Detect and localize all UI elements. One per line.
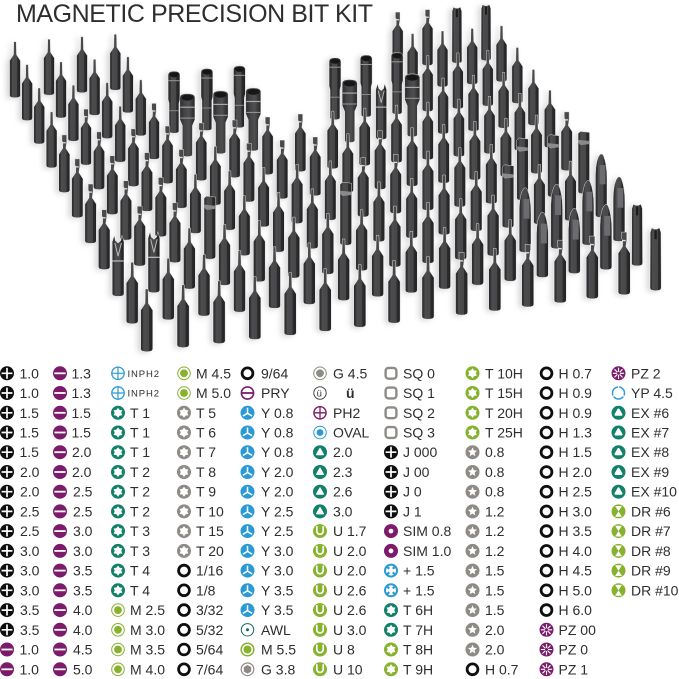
legend column 4: M 5.0 <box>196 385 231 401</box>
legend column 3: INPH2 <box>128 389 160 400</box>
legend column 9: PZ 00 <box>558 622 596 638</box>
legend column 4: 5/32 <box>196 622 223 638</box>
legend column 6: U 2.6 <box>333 602 367 618</box>
legend column 2: 3.5 <box>73 582 93 598</box>
legend column 6: U 10 <box>333 661 363 677</box>
legend column 10: EX #10 <box>631 484 677 500</box>
legend column 5: Y 0.8 <box>261 444 294 460</box>
legend column 6: U 1.7 <box>333 523 367 539</box>
legend column 5: Y 2.0 <box>261 464 294 480</box>
legend column 9: H 0.9 <box>558 405 592 421</box>
legend column 8 <box>466 365 523 677</box>
legend column 3: T 2 <box>130 484 150 500</box>
legend column 7: + 1.5 <box>403 563 435 579</box>
legend column 9: H 3.0 <box>558 503 592 519</box>
legend column 5: Y 3.0 <box>261 563 294 579</box>
legend column 6: U 8 <box>333 642 355 658</box>
legend column 7: SIM 1.0 <box>403 543 451 559</box>
legend column 10: PZ 2 <box>631 365 661 381</box>
legend column 3: T 2 <box>130 503 150 519</box>
legend column 2: 4.0 <box>73 602 93 618</box>
bit row 10 <box>126 204 643 324</box>
legend column 7: T 7H <box>403 622 433 638</box>
legend column 6: G 4.5 <box>333 365 367 381</box>
legend column 4: T 20 <box>196 543 224 559</box>
legend column 3: T 4 <box>130 563 150 579</box>
bit row 5 <box>59 90 555 193</box>
legend column 8: 0.8 <box>485 444 505 460</box>
legend column 10: EX #9 <box>631 464 669 480</box>
legend column 2: 2.0 <box>72 464 92 480</box>
legend column 9: H 0.7 <box>558 365 592 381</box>
legend column 4: T 10 <box>196 503 224 519</box>
legend column 8: 2.0 <box>485 622 505 638</box>
legend column 1: 1.0 <box>20 365 39 381</box>
legend column 8: T 25H <box>485 424 523 440</box>
legend column 10: EX #6 <box>631 405 669 421</box>
legend column 9: H 2.5 <box>558 484 592 500</box>
legend column 9: H 6.0 <box>558 602 592 618</box>
legend column 8: 1.5 <box>485 563 505 579</box>
legend column 6 <box>313 365 370 677</box>
legend column 3: M 2.5 <box>130 602 165 618</box>
legend column 2: 4.5 <box>73 642 93 658</box>
legend column 6: U 2.6 <box>333 582 367 598</box>
legend column 3: T 3 <box>130 543 150 559</box>
legend column 1: 3.0 <box>20 543 40 559</box>
legend column 7: SQ 1 <box>403 385 435 401</box>
legend column 5: Y 3.5 <box>261 582 294 598</box>
legend column 2: 3.0 <box>73 523 93 539</box>
bit row 11 <box>141 228 661 352</box>
bit row 3 with small sockets <box>34 48 523 144</box>
legend column 4: T 7 <box>196 444 216 460</box>
legend column 2 <box>53 365 93 677</box>
legend column 8: T 10H <box>485 365 523 381</box>
legend column 2: 3.5 <box>73 563 93 579</box>
legend column 5: G 3.8 <box>261 661 295 677</box>
legend column 3: M 3.5 <box>130 642 165 658</box>
bit row 2 <box>22 26 507 121</box>
title: MAGNETIC PRECISION BIT KIT <box>16 0 373 28</box>
legend column 1: 1.5 <box>20 424 39 440</box>
legend column 9: H 2.0 <box>558 464 592 480</box>
legend column 8: 0.8 <box>485 484 505 500</box>
legend column 9: PZ 1 <box>558 661 588 677</box>
legend column 5 <box>240 365 296 677</box>
legend column 4: 7/64 <box>196 661 223 677</box>
legend column 4: 1/8 <box>196 582 216 598</box>
legend column 1: 1.5 <box>20 444 39 460</box>
legend column 8: 0.8 <box>485 464 505 480</box>
legend column 7: SQ 0 <box>403 365 435 381</box>
legend column 2: 3.0 <box>73 543 93 559</box>
legend column 5: M 5.5 <box>261 642 296 658</box>
legend column 3: T 2 <box>130 464 150 480</box>
legend column 7: T 9H <box>403 661 433 677</box>
legend column 7: J 1 <box>403 503 422 519</box>
legend column 6: OVAL <box>333 424 370 440</box>
legend column 8: 1.5 <box>485 602 505 618</box>
legend column 9: H 1.5 <box>558 444 592 460</box>
legend column 4: 3/32 <box>196 602 223 618</box>
legend column 7: J 00 <box>403 464 430 480</box>
legend column 2: 2.0 <box>72 444 92 460</box>
legend column 8: 1.2 <box>485 523 505 539</box>
legend column 7: SIM 0.8 <box>403 523 451 539</box>
legend column 10: DR #8 <box>631 543 671 559</box>
bit row 4 with large sockets <box>46 70 539 168</box>
legend column 8: H 0.7 <box>485 661 519 677</box>
legend column 6: ü <box>346 385 355 401</box>
legend column 1: 1.5 <box>20 405 39 421</box>
legend column 2: 5.0 <box>73 661 93 677</box>
legend column 9 <box>540 365 596 677</box>
legend column 10: DR #6 <box>631 503 671 519</box>
legend column 2: 1.5 <box>72 405 91 421</box>
legend column 7: J 000 <box>403 444 437 460</box>
legend column 6: 3.0 <box>333 503 353 519</box>
bit row 7 <box>85 131 590 243</box>
legend column 3: T 3 <box>130 523 150 539</box>
legend column 8: 2.0 <box>485 642 505 658</box>
legend column 5: Y 2.5 <box>261 503 294 519</box>
legend column 6: 2.6 <box>333 484 353 500</box>
legend column 5: Y 3.5 <box>261 602 294 618</box>
legend column 2: 2.5 <box>73 503 93 519</box>
legend column 1: 2.5 <box>20 523 40 539</box>
legend column 2: 4.0 <box>73 622 93 638</box>
legend column 4 <box>177 365 231 677</box>
legend column 4: T 6 <box>196 424 216 440</box>
legend column 7: + 1.5 <box>403 582 435 598</box>
legend column 4: M 4.5 <box>196 365 231 381</box>
legend column 1: 3.0 <box>20 563 40 579</box>
legend column 3: T 1 <box>130 444 150 460</box>
legend column 7: T 6H <box>403 602 433 618</box>
legend column 5: AWL <box>261 622 291 638</box>
legend column 7: SQ 2 <box>403 405 435 421</box>
legend column 7: T 8H <box>403 642 433 658</box>
legend column 10: EX #8 <box>631 444 669 460</box>
legend column 1: 1.0 <box>20 385 39 401</box>
legend column 3 <box>111 367 165 677</box>
legend column 5: PRY <box>261 385 290 401</box>
bit row 6 <box>72 112 572 218</box>
legend column 5: Y 2.0 <box>261 484 294 500</box>
legend column 4: T 5 <box>196 405 216 421</box>
legend column 9: H 0.9 <box>558 385 592 401</box>
legend column 8: T 20H <box>485 405 523 421</box>
legend column 6: ü <box>317 388 322 400</box>
legend column 9: H 5.0 <box>558 582 592 598</box>
legend column 10 <box>612 365 679 598</box>
legend column 5: 9/64 <box>261 365 288 381</box>
legend column 1: 3.5 <box>20 622 40 638</box>
legend column 6: 2.3 <box>333 464 353 480</box>
legend column 5: Y 0.8 <box>261 424 294 440</box>
legend column 8: 1.5 <box>485 582 505 598</box>
legend column 4: T 15 <box>196 523 224 539</box>
legend column 4: 1/16 <box>196 563 223 579</box>
legend column 6: PH2 <box>333 405 360 421</box>
bit row 1 <box>10 5 491 98</box>
legend column 6: U 2.0 <box>333 563 367 579</box>
legend column 1: 2.0 <box>20 464 40 480</box>
legend column 1: 3.5 <box>20 602 40 618</box>
legend column 6: 2.0 <box>333 444 353 460</box>
legend column 5: Y 0.8 <box>261 405 294 421</box>
legend column 6: U 2.0 <box>333 543 367 559</box>
legend column 10: DR #9 <box>631 563 671 579</box>
bit row 9 <box>112 177 625 296</box>
legend column 1: 1.0 <box>20 642 39 658</box>
legend column 7: SQ 3 <box>403 424 435 440</box>
legend <box>0 365 679 677</box>
legend column 1: 2.0 <box>20 484 40 500</box>
legend column 3: M 3.0 <box>130 622 165 638</box>
legend column 7 <box>384 365 451 677</box>
legend column 3: T 4 <box>130 582 150 598</box>
legend column 3: M 4.0 <box>130 661 165 677</box>
legend column 6: U 3.0 <box>333 622 367 638</box>
legend column 4: T 9 <box>196 484 216 500</box>
legend column 10: EX #7 <box>631 424 669 440</box>
legend column 10: DR #7 <box>631 523 671 539</box>
legend column 3: INPH2 <box>128 369 160 380</box>
legend column 9: H 1.3 <box>558 424 592 440</box>
bit array illustration <box>10 5 661 352</box>
bit row 8 <box>98 154 607 270</box>
legend column 4: 5/64 <box>196 642 223 658</box>
legend column 7: J 0 <box>403 484 422 500</box>
legend column 9: H 4.0 <box>558 543 592 559</box>
legend column 5: Y 3.0 <box>261 543 294 559</box>
legend column 2: 2.5 <box>73 484 93 500</box>
legend column 8: T 15H <box>485 385 523 401</box>
legend column 9: H 3.5 <box>558 523 592 539</box>
legend column 4: T 8 <box>196 464 216 480</box>
legend column 10: YP 4.5 <box>631 385 673 401</box>
legend column 8: 1.2 <box>485 543 505 559</box>
legend column 9: PZ 0 <box>558 642 588 658</box>
legend column 9: H 4.5 <box>558 563 592 579</box>
legend column 10: DR #10 <box>631 582 679 598</box>
legend column 2: 1.3 <box>72 365 91 381</box>
legend column 1: 2.5 <box>20 503 40 519</box>
legend column 8: 1.2 <box>485 503 505 519</box>
legend column 2: 1.5 <box>72 424 91 440</box>
legend column 1: 1.0 <box>20 661 39 677</box>
legend column 3: T 1 <box>130 424 150 440</box>
legend column 1: 3.0 <box>20 582 40 598</box>
legend column 1 <box>0 365 40 677</box>
legend column 3: T 1 <box>130 405 150 421</box>
legend column 2: 1.3 <box>72 385 91 401</box>
legend column 5: Y 2.5 <box>261 523 294 539</box>
